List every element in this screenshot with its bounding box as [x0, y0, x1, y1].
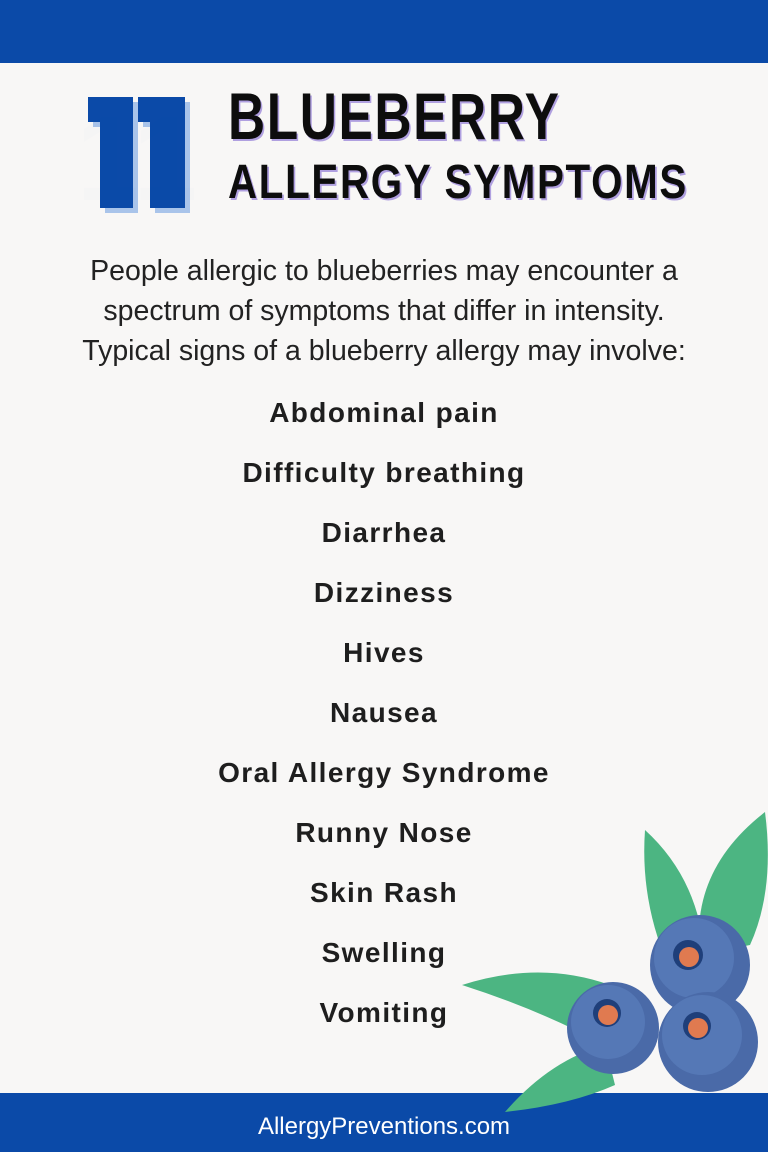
- intro paragraph: People allergic to blueberries may encounter a: [90, 255, 678, 287]
- symptom list: Nausea: [330, 697, 438, 728]
- title: ALLERGY SYMPTOMS: ALLERGY SYMPTOMS: [228, 156, 688, 209]
- symptom list: Oral Allergy Syndrome: [218, 757, 550, 788]
- symptom list: Swelling: [322, 937, 446, 968]
- symptom list: Runny Nose: [295, 817, 473, 848]
- symptom list: Difficulty breathing: [242, 457, 526, 488]
- symptom list: Hives: [343, 637, 425, 668]
- intro paragraph: [82, 255, 686, 367]
- symptom list: Skin Rash: [310, 877, 458, 908]
- title: BLUEBERRY: BLUEBERRY: [228, 79, 560, 153]
- intro paragraph: Typical signs of a blueberry allergy may involve:: [82, 335, 686, 367]
- illustration: blueberries with leaves: [462, 812, 768, 1112]
- top bar: [0, 0, 768, 63]
- symptom list: Diarrhea: [322, 517, 446, 548]
- symptom list: Vomiting: [320, 997, 448, 1028]
- symptom list: Dizziness: [314, 577, 454, 608]
- bottom bar: [0, 1093, 768, 1152]
- symptom list: Abdominal pain: [269, 397, 499, 428]
- footer website: AllergyPreventions.com: [258, 1113, 510, 1140]
- intro paragraph: spectrum of symptoms that differ in intensity.: [103, 295, 665, 327]
